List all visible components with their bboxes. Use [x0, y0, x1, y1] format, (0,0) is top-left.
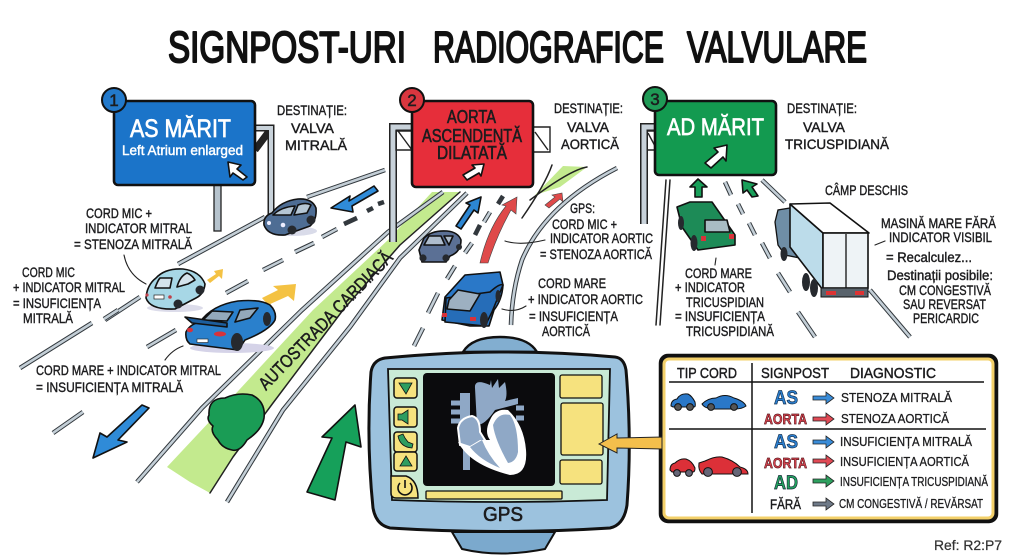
caption: insuficienta tricuspidiana: TRICUSPIDIAN [686, 295, 764, 310]
caption: destination 3 [785, 101, 889, 152]
caption: stenoza aortica: = STENOZA AORTICĂ [540, 247, 652, 262]
arrow: green right small [742, 180, 758, 197]
caption: insuficienta mitrala small heart: MITRALĂ [23, 311, 73, 326]
sign 1 arrow [228, 162, 247, 180]
caption: insuficienta tricuspidiana [675, 266, 774, 339]
title [168, 23, 867, 72]
table header [677, 365, 936, 382]
arrow: green left small [690, 179, 707, 197]
caption: destination 2: DESTINAȚIE: [554, 101, 623, 116]
sign 2 text: ASCENDENTĂ [422, 126, 522, 146]
sign 2 with gantry [393, 88, 550, 242]
caption: destination 1 [277, 103, 347, 153]
arrow: yellow large [262, 284, 296, 305]
sign 3 text: AD MĂRIT [667, 114, 764, 141]
caption: insuficienta tricuspidiana: CORD MARE [685, 266, 752, 281]
arrow: large green arrow [307, 405, 361, 500]
sign 2 text [422, 107, 522, 163]
truck [775, 203, 869, 297]
caption: large car without indicator: PERICARDIC [913, 311, 979, 326]
sign 1 with gantry [102, 88, 271, 231]
caption: insuficienta mitrala small heart: = INSUFICIENȚA [13, 296, 101, 311]
caption: large car without indicator: MASINĂ MARE FĂRĂ [881, 216, 996, 231]
GPS left buttons [391, 378, 418, 498]
sign 2 badge: 2 [407, 91, 417, 110]
caption: large car without indicator: INDICATOR VISIBIL [889, 230, 992, 245]
table rows signposts: AS [774, 432, 798, 453]
table rows signposts [764, 388, 807, 494]
car 2 light blue [145, 269, 205, 312]
heart illustration [451, 379, 526, 475]
road: left carriageway and median [20, 170, 467, 502]
leader lines [124, 240, 885, 360]
caption: stenoza aortica: INDICATOR AORTIC [550, 231, 653, 246]
sign 2 text: DILATATĂ [437, 143, 507, 163]
arrow: yellow small [207, 269, 223, 283]
reference note: Ref: R2:P7 [934, 537, 1002, 553]
label: no signpost: FĂRĂ [770, 497, 801, 512]
table rows signposts: AORTA [764, 455, 807, 472]
caption: stenoza aortica: CORD MIC + [552, 217, 617, 232]
table diagnoses: INSUFICIENȚA MITRALĂ [840, 434, 973, 449]
arrow: red small [545, 193, 563, 208]
table rows signposts: AD [774, 473, 798, 494]
caption: destination 2: AORTICĂ [561, 137, 619, 152]
caption: insuficienta mitrala small heart [13, 265, 125, 326]
GPS right buttons [426, 375, 603, 499]
caption: destination 2: VALVA [567, 120, 609, 135]
caption: insuficienta mitrala large heart [36, 363, 221, 395]
table diagnoses: STENOZA MITRALĂ [841, 390, 953, 405]
sign 1 text: AS MĂRIT [130, 114, 231, 143]
caption: stenoza mitrala: = STENOZA MITRALĂ [74, 237, 192, 252]
caption: insuficienta aortica: = INSUFICIENȚA [529, 309, 618, 324]
car 6 green [677, 202, 735, 251]
title: RADIOGRAFICE [433, 23, 664, 72]
arrow: blue lane arrow bottom left [93, 405, 149, 458]
car 3 blue sports [185, 300, 275, 353]
arrow: red large aortic [480, 197, 517, 263]
table arrows [813, 392, 834, 510]
table diagnoses: INSUFICIENȚA AORTICĂ [840, 454, 970, 469]
title: SIGNPOST-URI [168, 23, 406, 72]
table diagnoses: CM CONGESTIVĂ / REVĂRSAT [839, 496, 983, 511]
sign 1 subtitle: Left Atrium enlarged [122, 143, 243, 158]
caption: destination 3: DESTINAȚIE: [787, 101, 857, 116]
car 1 dark blue [264, 199, 317, 236]
caption: insuficienta tricuspidiana: = INSUFICIENȚA [675, 309, 765, 324]
caption: stenoza aortica: GPS: [570, 201, 595, 216]
table rows signposts: AORTA [764, 411, 807, 428]
caption: large car without indicator: SAU REVERSAT [903, 297, 986, 312]
GPS screen [423, 373, 555, 486]
caption: insuficienta mitrala large heart: CORD MARE + INDICATOR MITRAL [36, 363, 221, 378]
caption: destination 1: MITRALĂ [285, 138, 347, 153]
caption: destination 3: TRICUSPIDIANĂ [785, 137, 889, 152]
table panel [599, 356, 996, 521]
callout arrow to GPS [599, 434, 662, 453]
caption: insuficienta mitrala large heart: = INSUFICIENȚA MITRALĂ [36, 380, 183, 395]
table header: DIAGNOSTIC [850, 365, 936, 382]
caption: large car without indicator: = Recalculez... [886, 250, 972, 265]
small-heart car icons [671, 394, 746, 410]
sign 2 text: AORTA [447, 107, 496, 127]
car 5 blue [442, 272, 503, 328]
caption: insuficienta mitrala small heart: CORD MIC [22, 265, 75, 280]
sign 3 badge: 3 [650, 90, 660, 109]
caption: insuficienta aortica [528, 276, 643, 339]
sign 2 arrow [463, 164, 484, 180]
GPS device [369, 337, 629, 554]
caption: open field: CÂMP DESCHIS [825, 183, 908, 198]
table diagnoses: INSUFICIENȚA TRICUSPIDIANĂ [840, 474, 989, 489]
table header: TIP CORD [677, 365, 737, 382]
caption: destination 1: DESTINAȚIE: [277, 103, 347, 118]
car 4 grey-blue [419, 231, 462, 262]
large-heart car icons [670, 457, 748, 476]
caption: insuficienta aortica: AORTICĂ [542, 324, 590, 339]
caption: destination 2 [554, 101, 623, 152]
table header: SIGNPOST [761, 365, 829, 382]
arrow: blue lane arrow top [331, 186, 378, 212]
caption: destination 1: VALVA [291, 121, 334, 136]
GPS label: GPS [483, 504, 523, 526]
caption: insuficienta aortica: CORD MARE [538, 276, 606, 291]
caption: destination 3: VALVA [803, 120, 845, 135]
sign 3 with gantry [643, 87, 776, 224]
table diagnoses [839, 390, 989, 511]
sign 1 badge: 1 [109, 91, 119, 110]
road: aortic carriageway and exit [414, 165, 617, 346]
arrow: blue aortic lane [456, 197, 481, 229]
caption: stenoza aortica [540, 201, 653, 262]
caption: insuficienta tricuspidiana: + INDICATOR [675, 280, 745, 295]
caption: stenoza mitrala: INDICATOR MITRAL [85, 221, 192, 236]
table rows signposts: AS [774, 388, 798, 409]
caption: insuficienta mitrala small heart: + INDICATOR MITRAL [13, 280, 125, 295]
sign 3 arrow [705, 145, 727, 168]
caption: insuficienta aortica: + INDICATOR AORTIC [528, 292, 643, 307]
bush [208, 394, 264, 450]
caption: large car without indicator [881, 216, 996, 326]
title: VALVULARE [687, 23, 867, 72]
median label: AUTOSTRADA CARDIACĂ [254, 248, 397, 394]
road: tricuspid carriageway [656, 180, 910, 337]
sign 1 badge [102, 88, 126, 112]
caption: large car without indicator: Destinații posibile: [887, 268, 993, 283]
table diagnoses: STENOZA AORTICĂ [841, 411, 950, 426]
caption: large car without indicator: CM CONGESTIVĂ [899, 283, 991, 298]
caption: insuficienta tricuspidiana: TRICUSPIDIANĂ [686, 324, 774, 339]
caption: stenoza mitrala: CORD MIC + [86, 206, 152, 221]
caption: stenoza mitrala [74, 206, 192, 252]
sign 2 badge [400, 88, 424, 112]
